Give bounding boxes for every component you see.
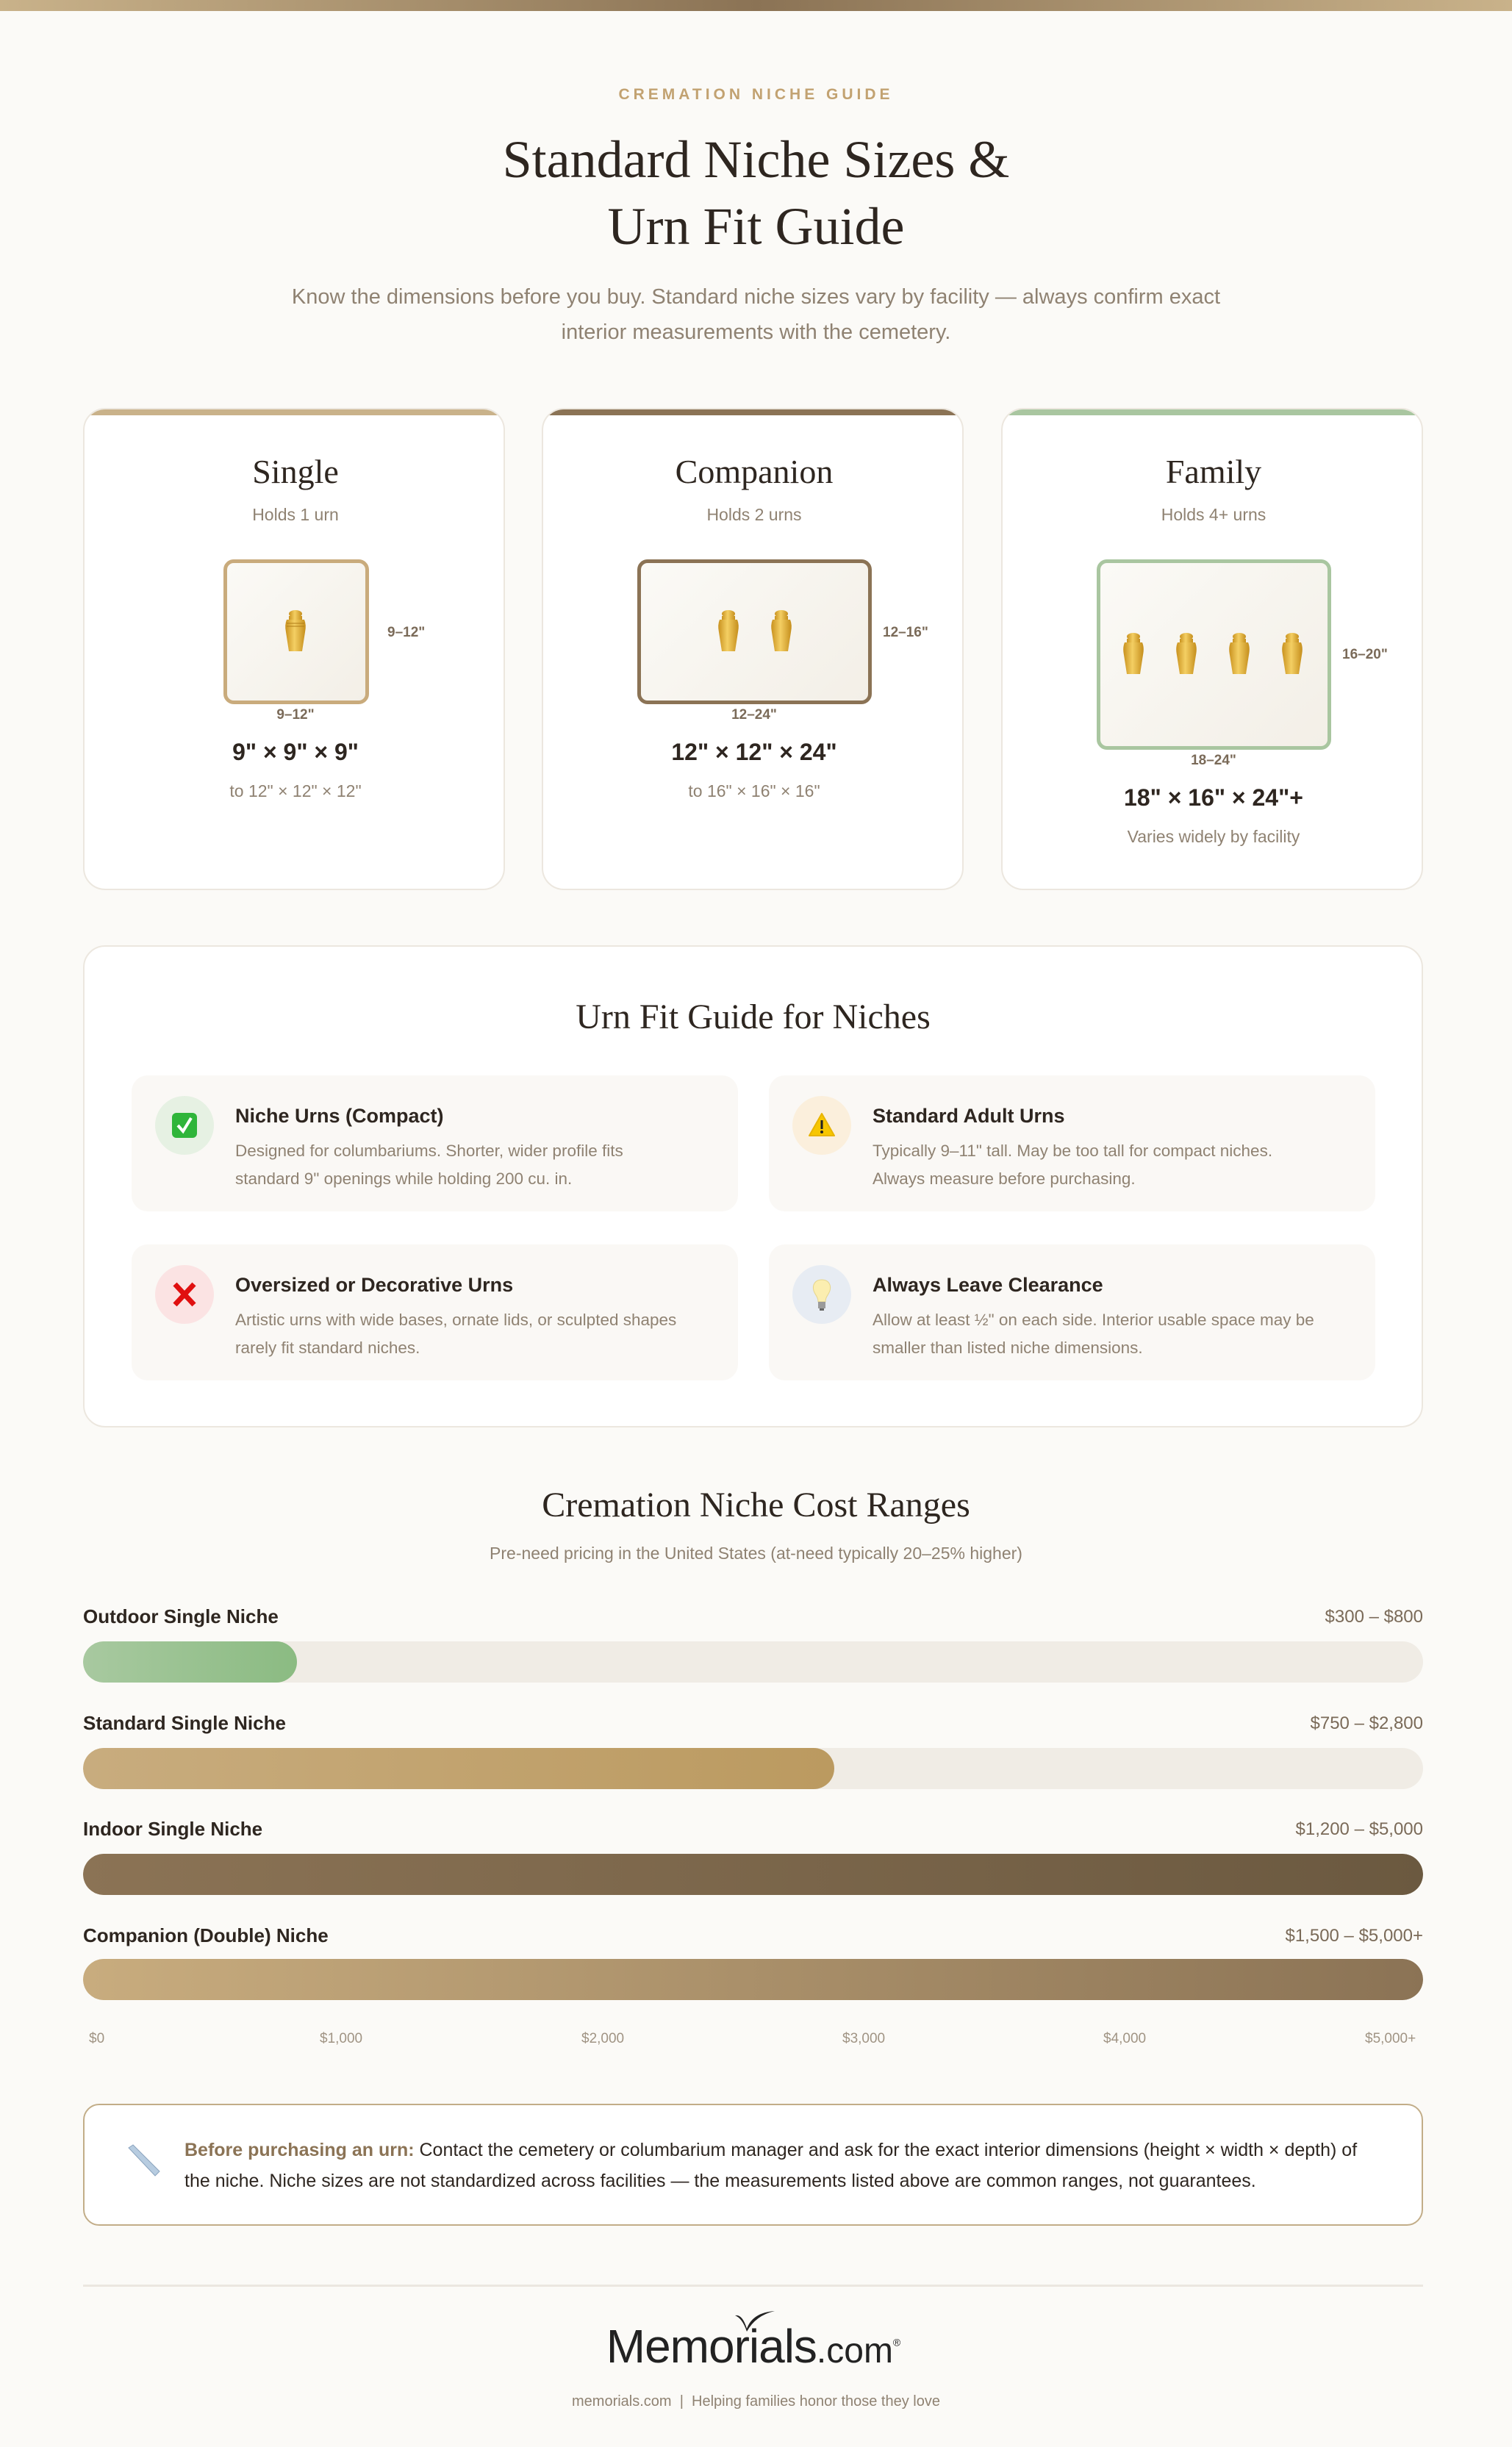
height label: 9–12" [387, 625, 425, 640]
item: oversized urns [132, 1244, 738, 1380]
title: Urn Fit Guide [607, 197, 904, 256]
subtitle: Know the dimensions before you buy. Standard niche sizes vary by facility — always confirm exact [292, 285, 1220, 309]
item: standard adult urns [769, 1075, 1375, 1211]
card title: Companion [676, 453, 833, 490]
axis labels: $4,000 [1103, 2031, 1146, 2046]
niche diagram [223, 559, 369, 704]
bar chart: cost ranges: $1,200 – $5,000 [1295, 1819, 1423, 1839]
eyebrow label: CREMATION NICHE GUIDE [618, 86, 894, 103]
card subtitle: Holds 4+ urns [1161, 505, 1266, 524]
range: to 16" × 16" × 16" [688, 781, 820, 800]
logo: Memorials.com® [606, 2320, 900, 2373]
axis labels: $0 [89, 2031, 104, 2046]
card title: Single [252, 453, 339, 490]
bar chart: cost ranges: $750 – $2,800 [1311, 1713, 1423, 1733]
heading: Urn Fit Guide for Niches [576, 997, 931, 1036]
icon: ruler [128, 2145, 160, 2176]
range: Varies widely by facility [1128, 827, 1300, 846]
dimensions: 12" × 12" × 24" [671, 739, 837, 765]
bar chart: cost ranges: $300 – $800 [1325, 1607, 1423, 1627]
item: niche urns: Designed for columbariums. Shorter, wider profile fits standard 9" openings while holding 200 cu. in. [235, 1142, 623, 1188]
item: standard adult urns: Standard Adult Urns [873, 1105, 1065, 1127]
cost subtitle: Pre-need pricing in the United States (at-need typically 20–25% higher) [490, 1544, 1022, 1563]
card title: Family [1166, 453, 1261, 490]
item: oversized urns: Artistic urns with wide bases, ornate lids, or sculpted shapes rarely fit standard niches. [235, 1311, 676, 1357]
item: niche urns [132, 1075, 738, 1211]
icon: check [155, 1096, 214, 1155]
item: standard adult urns: Typically 9–11" tall. May be too tall for compact niches. Always measure before purchasing. [873, 1142, 1272, 1188]
icon: warning [792, 1096, 851, 1155]
panel: single niche card [83, 408, 505, 890]
axis labels: $2,000 [581, 2031, 624, 2046]
width label: 12–24" [731, 707, 777, 723]
subtitle [292, 285, 1220, 344]
panel: companion niche card [542, 408, 964, 890]
icon: urns [1123, 633, 1303, 674]
bar: outdoor: Outdoor Single Niche [83, 1605, 279, 1627]
top accent bar [0, 0, 1512, 11]
bar: indoor: Indoor Single Niche [83, 1818, 262, 1840]
icon: lightbulb [792, 1265, 851, 1324]
panel: urn fit guide [83, 945, 1423, 1427]
item: clearance: Always Leave Clearance [873, 1274, 1103, 1296]
axis labels [89, 2031, 1416, 2046]
item: niche urns: Niche Urns (Compact) [235, 1105, 444, 1127]
bar chart: cost ranges: $1,500 – $5,000+ [1285, 1926, 1423, 1946]
panel: family niche card [1001, 408, 1423, 890]
item: clearance [769, 1244, 1375, 1380]
callout text: Before purchasing an urn: Contact the cemetery or columbarium manager and ask for the exact interior dimensions (height × width × depth) of the niche. Niche sizes are not standardized across facilities — the measurements listed above are common ranges, not guarantees. [184, 2140, 1357, 2191]
height label: 12–16" [883, 625, 928, 640]
axis labels: $3,000 [842, 2031, 885, 2046]
card subtitle: Holds 1 urn [252, 505, 339, 524]
subtitle: interior measurements with the cemetery. [562, 320, 950, 344]
niche diagram [1097, 559, 1331, 750]
card subtitle: Holds 2 urns [706, 505, 802, 524]
icon: urn [285, 610, 306, 651]
icon: urns [718, 610, 792, 651]
item: clearance: Allow at least ½" on each side. Interior usable space may be smaller than listed niche dimensions. [873, 1311, 1314, 1357]
dimensions: 18" × 16" × 24"+ [1124, 784, 1303, 811]
niche diagram [637, 559, 872, 704]
bar chart: cost ranges [83, 1605, 1423, 2000]
width label: 9–12" [276, 707, 315, 723]
item: oversized urns: Oversized or Decorative Urns [235, 1274, 513, 1296]
height label: 16–20" [1342, 647, 1388, 662]
width label: 18–24" [1191, 753, 1236, 768]
icon: cross [155, 1265, 214, 1324]
icon: bird [735, 2311, 775, 2332]
range: to 12" × 12" × 12" [229, 781, 362, 800]
heading: cost ranges: Cremation Niche Cost Ranges [542, 1486, 970, 1525]
footer text: memorials.com | Helping families honor those they love [572, 2393, 940, 2410]
title [503, 130, 1009, 256]
dimensions: 9" × 9" × 9" [232, 739, 359, 765]
axis labels: $1,000 [320, 2031, 362, 2046]
bar: companion: Companion (Double) Niche [83, 1924, 329, 1946]
callout: before purchasing [83, 2104, 1423, 2226]
bar: standard: Standard Single Niche [83, 1712, 286, 1734]
title: Standard Niche Sizes & [503, 130, 1009, 189]
axis labels: $5,000+ [1365, 2031, 1416, 2046]
